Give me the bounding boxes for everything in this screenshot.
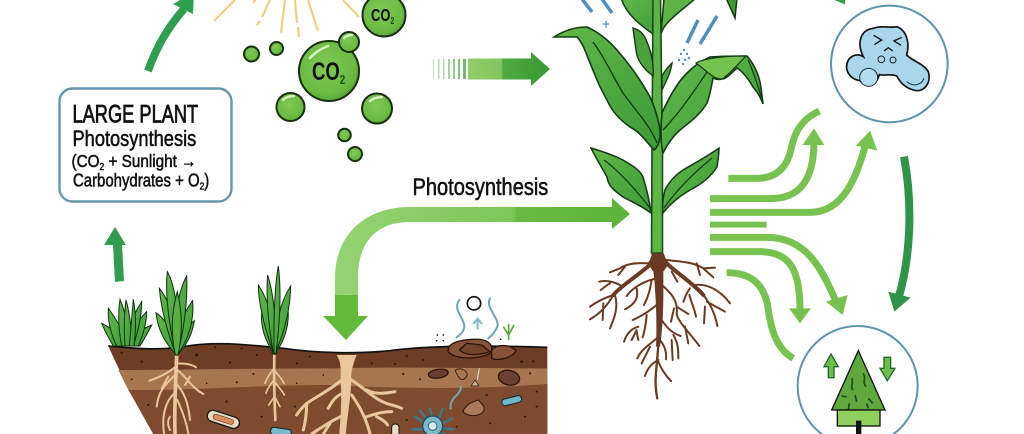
carbon dioxide bubbles <box>244 0 406 161</box>
leaf: far right tip <box>726 0 737 18</box>
heading: large plant: LARGE PLANT <box>72 100 198 128</box>
bacteria capsules <box>206 395 522 434</box>
leaf: top right <box>661 0 696 34</box>
plant: grass tuft <box>102 299 152 346</box>
microbe <box>413 408 453 434</box>
label: small CO2 bubble: CO <box>371 6 390 26</box>
text: equation line two: ) <box>204 170 209 191</box>
label: photosynthesis: Photosynthesis <box>412 173 548 200</box>
label: large CO2 bubble: 2 <box>340 74 345 87</box>
rocks and organic matter <box>428 339 521 416</box>
icon: tree circle <box>798 326 918 434</box>
soil cross-section <box>102 266 547 434</box>
panel: large plant photosynthesis box <box>60 88 232 202</box>
roots: soil plants <box>149 355 402 434</box>
arrow: dark green cycle <box>888 157 911 312</box>
flow arrowheads <box>789 128 877 323</box>
leaf: small upper right <box>662 63 672 90</box>
plant: main root system <box>590 253 730 398</box>
text: equation line two: 2 <box>200 181 204 192</box>
plant: main stem and leaves <box>554 0 763 253</box>
arrow: top-left curved green <box>148 0 194 71</box>
text: equation line one: + Sunlight → <box>104 151 196 171</box>
label: small CO2 bubble: 2 <box>390 15 395 26</box>
leaf: top left <box>621 0 660 34</box>
arrow: top centre to plant <box>433 52 550 86</box>
leaf: small upper left <box>633 28 653 76</box>
sun rays <box>214 0 359 37</box>
flow lines <box>710 111 865 358</box>
text: equation line one: 2 <box>100 161 104 172</box>
plant: tall grass two <box>258 266 291 354</box>
leaf: large right <box>661 56 763 153</box>
outflow arrows and cycle icons <box>710 0 948 434</box>
text: equation line two: Carbohydrates + O <box>73 170 200 191</box>
icon: water molecule circle <box>831 6 948 122</box>
stem <box>652 0 662 253</box>
plant: tall grass one <box>156 272 194 355</box>
arrow tip at top of water circle <box>832 0 845 4</box>
worm <box>451 387 461 408</box>
soil layers <box>108 344 547 434</box>
soil specks <box>121 346 538 427</box>
leaf: lower right <box>663 148 719 213</box>
leaf: large left <box>554 27 660 150</box>
transpiration dashes <box>582 0 717 65</box>
respired gases above soil <box>436 297 514 341</box>
leaf: lower left <box>591 148 651 213</box>
label: large CO2 bubble: CO <box>312 57 340 86</box>
arrow: photosynthesis flow forking to soil and plant <box>323 198 630 340</box>
arrow: small up arrow to box <box>104 227 126 282</box>
text: photosynthesis: Photosynthesis <box>72 128 196 151</box>
text: equation line one: (CO <box>72 151 100 171</box>
